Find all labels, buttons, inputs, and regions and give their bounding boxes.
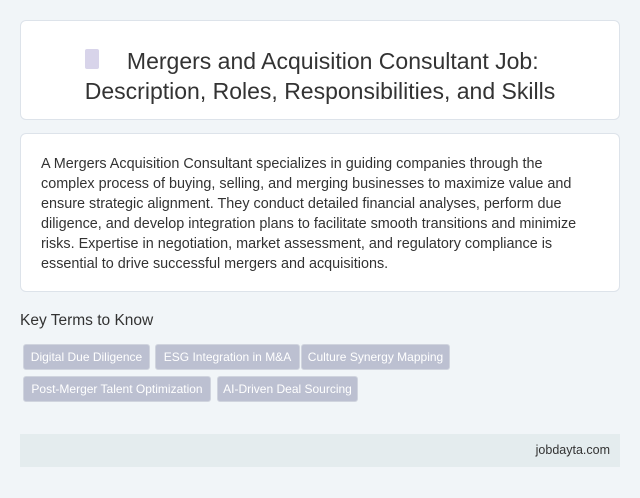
tag <box>23 376 211 402</box>
tag: AI-Driven Deal Sourcing <box>223 382 352 396</box>
tag <box>155 344 300 370</box>
description text: risks. Expertise in negotiation, market assessment, and regulatory compliance is <box>41 236 552 252</box>
title: Description, Roles, Responsibilities, and Skills <box>85 78 555 104</box>
tag: Digital Due Diligence <box>31 350 142 364</box>
description card <box>20 133 620 292</box>
description text <box>41 156 576 272</box>
tag <box>23 344 150 370</box>
icon: receipt <box>85 49 99 69</box>
description text: ensure strategic alignment. They conduct detailed financial analyses, perform due <box>41 196 562 212</box>
title: Mergers and Acquisition Consultant Job: <box>127 48 539 74</box>
tag: ESG Integration in M&A <box>164 350 291 364</box>
footer <box>20 434 620 467</box>
description text: essential to drive successful mergers and acquisitions. <box>41 256 388 272</box>
description text: A Mergers Acquisition Consultant specializes in guiding companies through the <box>41 156 543 172</box>
tag <box>217 376 358 402</box>
description text: complex process of buying, selling, and merging businesses to maximize value and <box>41 176 571 192</box>
title <box>85 48 555 104</box>
heading: key terms: Key Terms to Know <box>20 312 153 329</box>
description text: diligence, and develop integration plans to facilitate smooth transitions and minimize <box>41 216 576 232</box>
tag <box>301 344 450 370</box>
tag: Culture Synergy Mapping <box>308 350 443 364</box>
tags <box>23 344 450 402</box>
tag: Post-Merger Talent Optimization <box>31 382 203 396</box>
footer text: jobdayta.com <box>536 443 610 457</box>
title card <box>20 20 620 120</box>
